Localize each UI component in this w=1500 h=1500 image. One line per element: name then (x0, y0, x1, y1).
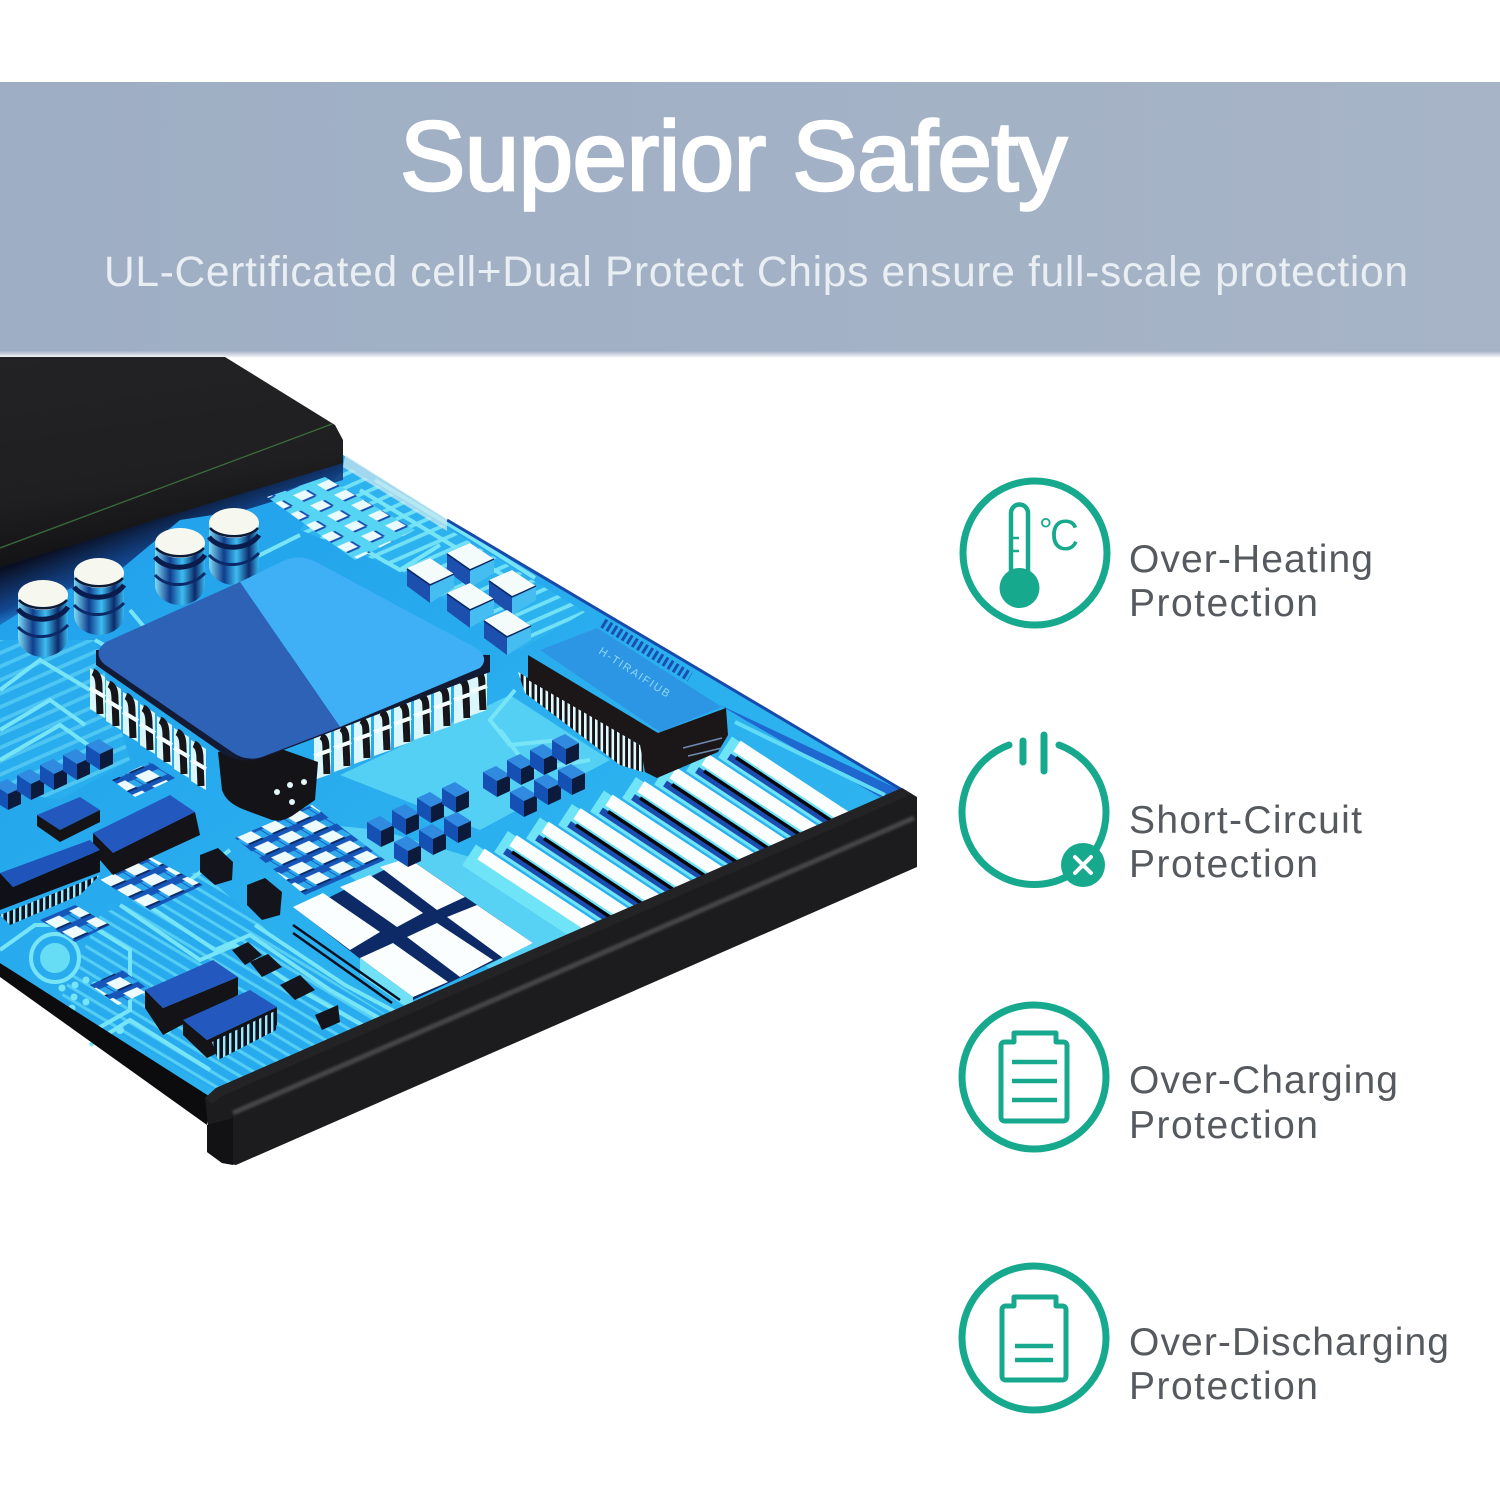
black battery cell block (0, 357, 343, 567)
feature: short-circuit (962, 735, 1362, 887)
chip (145, 960, 238, 1035)
front trace stripes (469, 746, 854, 940)
label: Over-Charging (1129, 1059, 1398, 1102)
header banner (0, 82, 1500, 358)
chip (0, 840, 100, 925)
chip (183, 990, 277, 1060)
small black components (200, 848, 340, 1030)
label line two: Protection (1129, 1365, 1318, 1408)
small white grid components (40, 477, 415, 1005)
main processor chip (90, 557, 490, 820)
celsius letter: C (1050, 511, 1079, 560)
secondary chip (518, 628, 728, 778)
lower-left dark chips (0, 795, 340, 1060)
board left edge (0, 963, 212, 1125)
white power pads (293, 858, 533, 1012)
chip (37, 797, 100, 842)
label line two: Protection (1129, 582, 1318, 625)
capacitors (18, 508, 259, 657)
chip top dark face (98, 582, 340, 759)
icon: thermometer (963, 481, 1107, 625)
feature: over-discharging (962, 1266, 1449, 1410)
pins left (90, 668, 206, 790)
translucent glass strip (343, 455, 447, 531)
label: Over-Heating (1129, 538, 1373, 581)
icon: full battery (962, 1005, 1106, 1149)
label line two: Protection (1129, 843, 1318, 886)
chip marking: H-TIRAIFIUB (596, 645, 672, 700)
blue finned component rows (0, 734, 585, 867)
dark chip corner (218, 745, 318, 820)
title: Superior Safety (400, 101, 1067, 211)
chip top light face (240, 557, 484, 727)
icon: low battery (962, 1266, 1106, 1410)
label: Over-Discharging (1129, 1321, 1449, 1364)
label: Short-Circuit (1129, 799, 1362, 842)
chip (93, 795, 200, 875)
chip side (96, 650, 490, 761)
feature: over-heating (963, 481, 1373, 625)
subtitle: UL-Certificated cell+Dual Protect Chips ensure full-scale protection (104, 249, 1408, 296)
circuit traces (0, 480, 590, 1070)
icon: power with cross (962, 735, 1106, 887)
degree sign: ° (1039, 512, 1053, 550)
black end cap bar (205, 788, 917, 1165)
right edge strip (720, 705, 900, 797)
pins right (314, 668, 487, 780)
circuit board (0, 455, 905, 1100)
label line two: Protection (1129, 1104, 1318, 1147)
battery with exposed circuit board illustration (0, 357, 917, 1165)
block shadow on board (0, 462, 343, 625)
feature: over-charging (962, 1005, 1398, 1149)
white square components (407, 543, 536, 655)
